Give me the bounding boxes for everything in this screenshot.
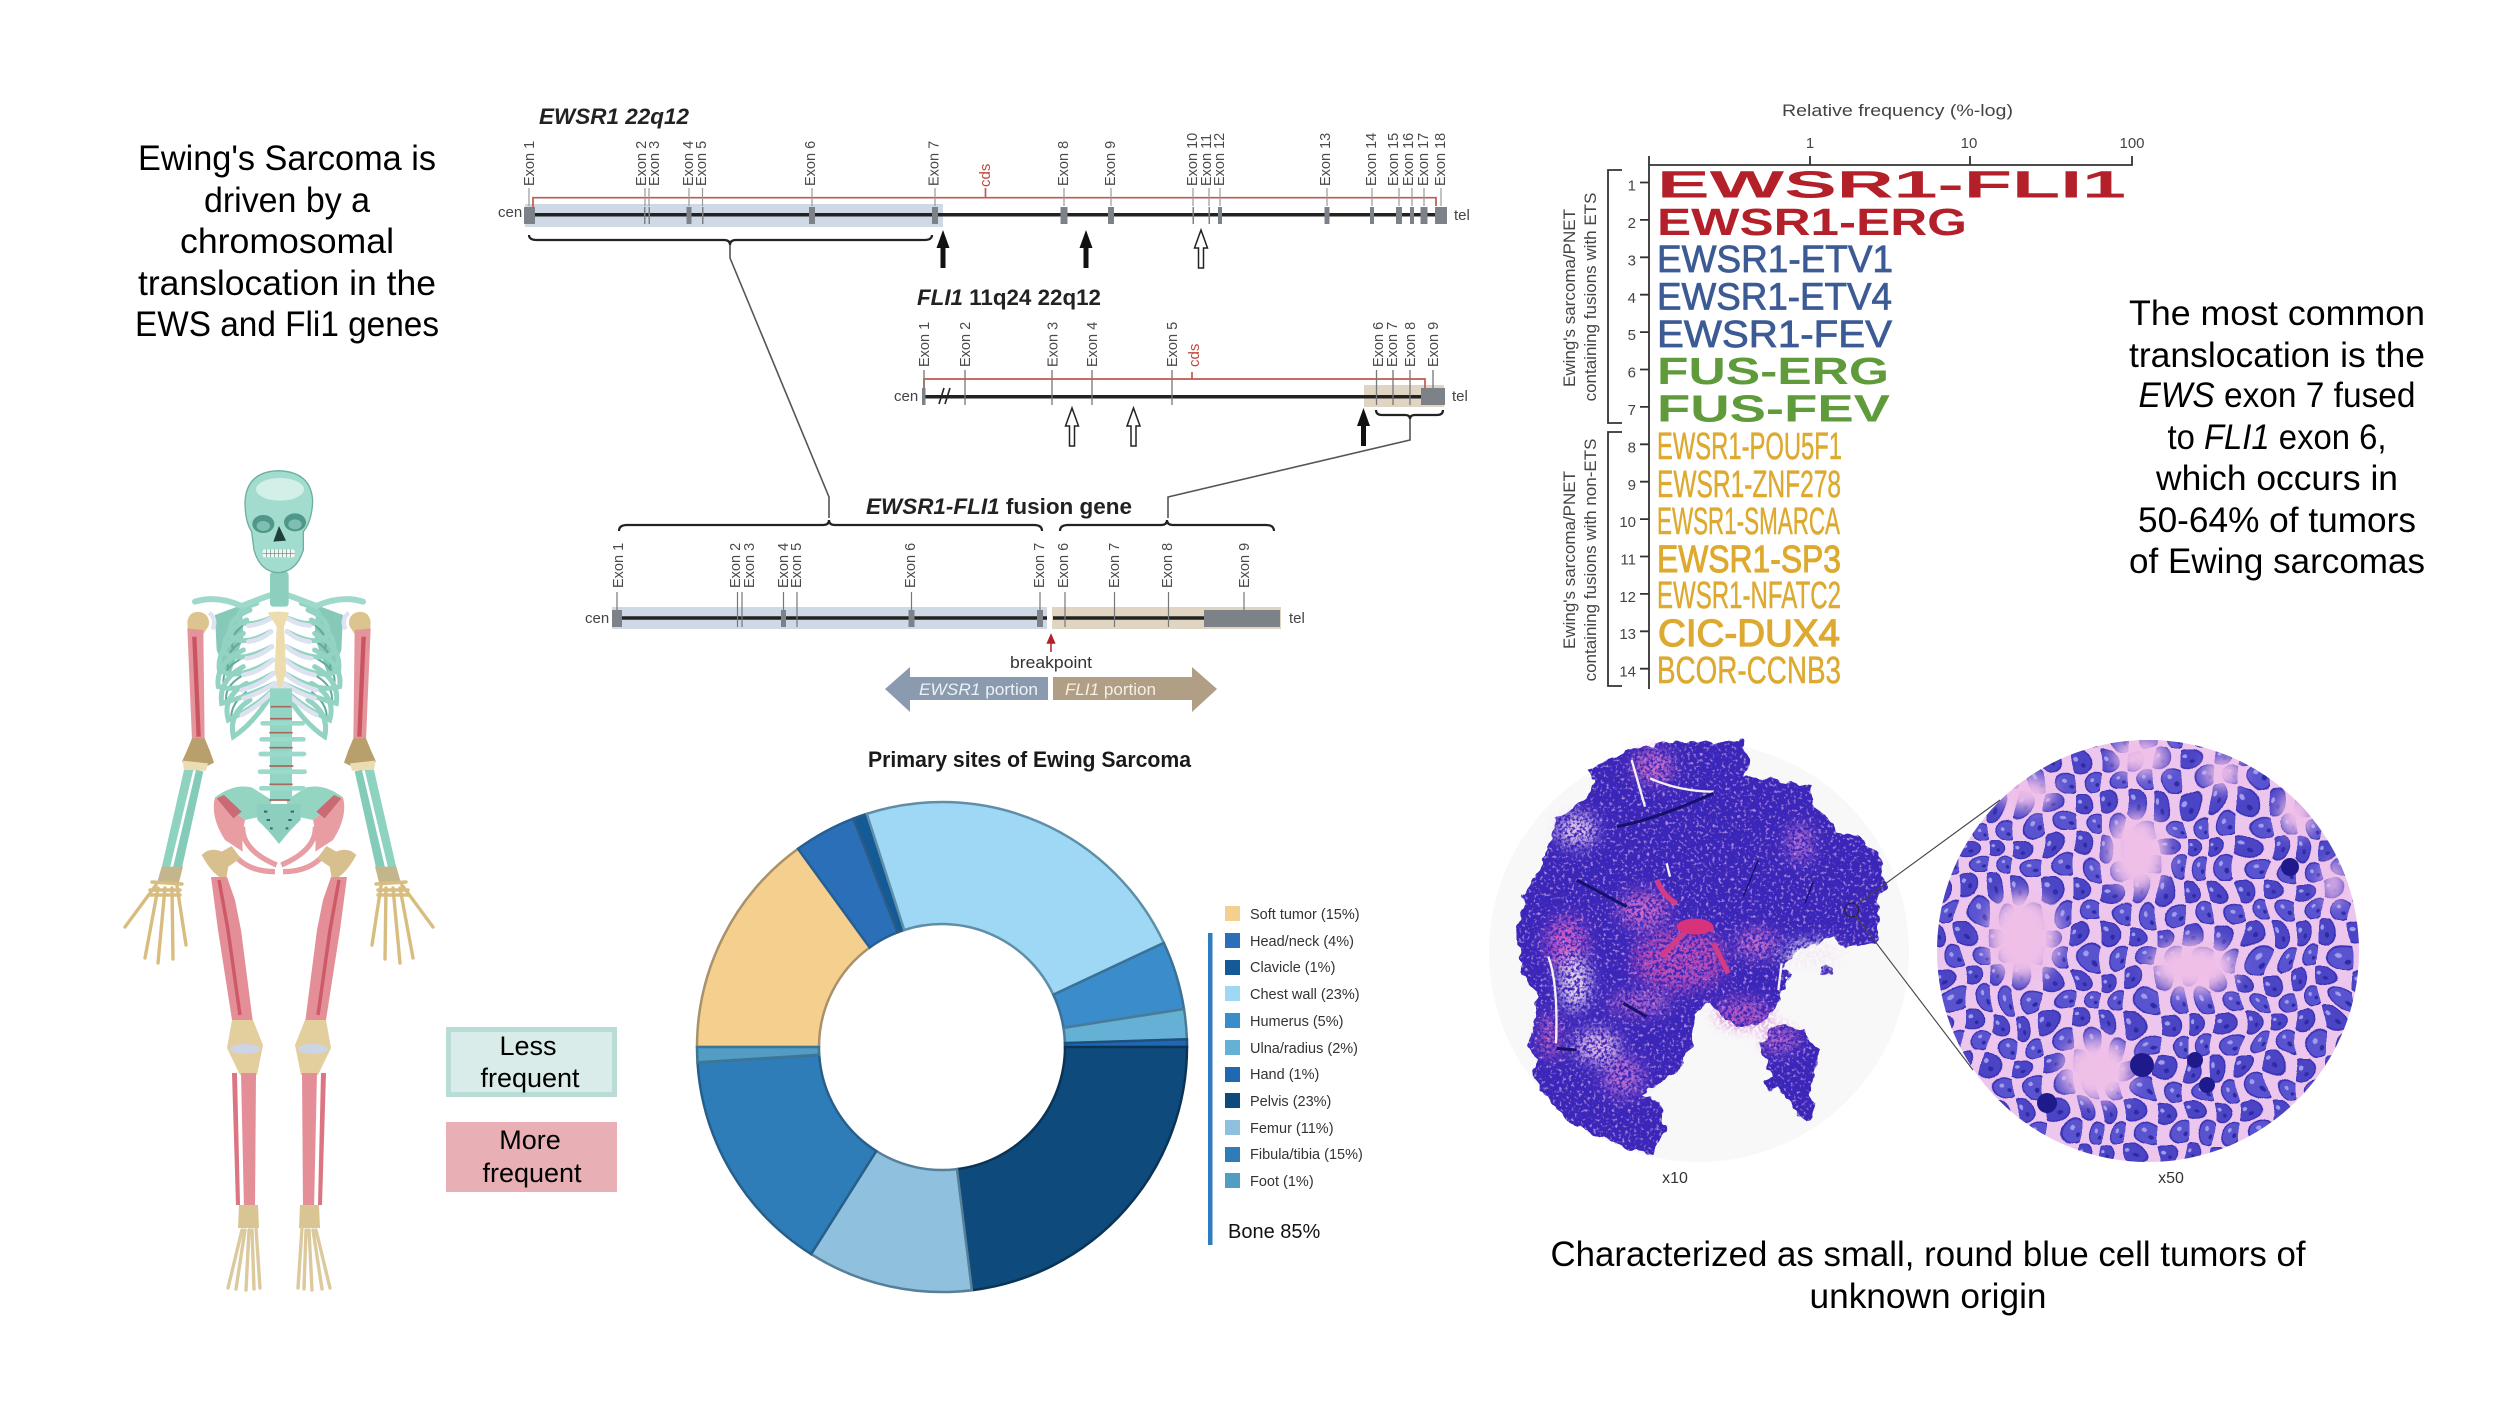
text block: histology caption: unknown origin [1810,1277,2046,1316]
rotated label line: fusions with non-ETS: containing fusions with non-ETS [1581,439,1600,681]
text block: most common translocation: The most common [2129,294,2425,333]
heading: chromosomal translocation text [135,139,439,344]
exon labels: Exon 8 [1056,141,1072,186]
fusion names: FUS-FEV [1657,388,1891,430]
legend: more frequent [446,1122,617,1192]
arrow: EWSR1 portion: EWSR1 portion [919,680,1038,699]
coding sequence bracket [533,188,1436,213]
panel: primary sites donut chart [697,747,1363,1292]
tibia [241,1073,256,1210]
axis tick labels: 100 [2119,135,2145,152]
exon labels: Exon 15 [1386,133,1402,186]
field background [1489,742,1909,1162]
chart title: Primary sites of Ewing Sarcoma [868,747,1192,772]
costal cartilage [242,618,277,715]
gene backbone [622,616,1205,620]
skull [245,471,313,573]
chart legend: Humerus (5%) [1250,1014,1343,1030]
hollow breakpoint arrows [1066,408,1140,446]
fusion names: EWSR1-ZNF278 [1657,464,1841,506]
legend: less frequent: Less [499,1031,557,1061]
solid breakpoint arrows [936,230,1092,268]
chart legend: Chest wall (23%) [1250,987,1360,1003]
chart legend: Femur (11%) [1250,1121,1334,1137]
humerus shaft [187,628,205,740]
fusion names [1657,164,2126,692]
braces [619,520,1274,531]
scapula [215,605,243,680]
eye socket shading [257,521,270,531]
stroma patches [1987,739,2343,1102]
ulna [159,770,193,881]
knee [227,1020,263,1075]
caption: x50: x50 [2158,1170,2184,1187]
exon labels: Exon 18 [1433,133,1449,186]
dark cracks [1557,793,1713,1050]
foot [228,1228,260,1290]
chart legend: Hand (1%) [1250,1067,1319,1083]
fusion names: EWSR1-SP3 [1657,539,1841,581]
heading: chromosomal translocation text: driven by a [204,181,371,220]
EWSR1 region band [612,607,1047,629]
chart legend: Pelvis (23%) [1250,1094,1331,1110]
knee cartilage [230,1044,260,1054]
intervertebral discs [269,707,293,800]
gene backbone [528,213,1442,216]
skeleton left half [125,595,277,1290]
chart legend: Soft tumor (15%) [1250,907,1360,923]
fusion names: CIC-DUX4 [1658,613,1840,655]
exon labels: Exon 12 [1212,133,1228,186]
eosinophilic and pale stroma [1541,750,1859,1097]
text block: most common translocation: 50-64% of tumors [2138,501,2416,540]
row numbers: 4 [1628,290,1636,307]
title: FLI1 11q24 22q12: FLI1 11q24 22q12 [917,285,1101,310]
exon labels: Exon 6 [803,141,819,186]
heading: chromosomal translocation text: translocation in the [138,264,436,303]
text block: histology caption [1550,1235,2306,1316]
exon labels: Exon 2 [958,322,974,367]
arrow: EWSR1 portion [885,667,1048,712]
exon labels: Exon 3 [1046,322,1062,367]
hollow breakpoint arrow [1194,230,1208,268]
forehead highlight [256,478,304,501]
rotated label line: Ewing's sarcoma/PNET ETS: Ewing's sarcoma/PNET [1560,209,1579,387]
rotated label line: Ewing's sarcoma/PNET non-ETS: Ewing's sarcoma/PNET [1560,471,1579,649]
clavicle [195,595,270,606]
chromosome break [939,388,950,404]
arm and torso bones [157,595,277,884]
exon boxes [922,388,1445,405]
connector: FLI1 portion to fusion gene [1168,419,1410,518]
cen and tel labels: tel [1452,388,1468,405]
chart legend: Ulna/radius (2%) [1250,1041,1358,1057]
tumor cells [1937,740,2359,1162]
bone bracket bar [1208,933,1212,1245]
legend: less frequent [448,1030,614,1094]
fusion names: EWSR1-ETV1 [1657,239,1893,281]
eye sockets [252,515,274,533]
text block: most common translocation: translocation is the [2129,336,2425,375]
back ribs [223,625,247,725]
cen and tel labels: cen [498,204,522,221]
cen and tel labels: cen [585,610,609,627]
legend: less frequent: frequent [480,1063,580,1093]
panel: fusion frequency chart [1560,101,2145,692]
donut [697,802,1187,1292]
solid breakpoint arrow [1357,408,1370,446]
exon labels: Exon 6 [1056,543,1072,588]
exon labels: Exon 16 [1401,133,1417,186]
title: EWSR1 22q12: EWSR1 22q12 [539,104,690,129]
heading: chromosomal translocation text: EWS and Fli1 genes [135,305,439,344]
dark nuclei [2037,858,2299,1113]
panel: histology x50 [1937,740,2359,1162]
exon labels: Exon 13 [1318,133,1334,186]
legend: more frequent: frequent [482,1158,582,1188]
exon labels: Exon 6 [1371,322,1387,367]
exon labels: Exon 10 [1185,133,1201,186]
cen and tel labels: cen [894,388,918,405]
skeleton right half [281,595,433,1290]
panel: skeleton illustration [125,471,433,1290]
humerus distal [182,738,214,767]
sacral holes [264,812,294,828]
ilium lower [214,797,245,852]
fusion names: EWSR1-SMARCA [1657,501,1840,543]
zoom guide lines [1855,800,2000,1070]
mottled stroma [1541,750,1843,1097]
fusion names: BCOR-CCNB3 [1657,650,1841,692]
humerus stripe [194,637,199,737]
row numbers: 13 [1619,626,1636,643]
row numbers: 3 [1628,252,1636,270]
text block: histology caption: Characterized as small, round blue cell tumors of [1550,1235,2306,1274]
chart legend [1225,906,1363,1190]
panel: EWSR1-FLI1 fusion gene diagram [585,494,1305,712]
thin dark lines [1743,860,1813,903]
teeth [263,549,295,557]
exon labels: Exon 7 [1032,543,1048,588]
row numbers: 1 [1628,178,1636,194]
title: fusion gene: EWSR1-FLI1 fusion gene [866,494,1132,519]
lumbar spine [270,688,292,800]
exon labels: Exon 8 [1160,543,1176,588]
exon boxes [524,207,1447,224]
femur shaft [211,877,253,1023]
pink stroma [1930,730,2370,1170]
exon leader lines [617,592,1244,627]
row numbers: 8 [1628,440,1636,456]
hemorrhage [1677,919,1713,935]
radius [171,770,203,877]
highlighted region [1364,385,1444,407]
magnified area marker [1845,903,1859,917]
heading: chromosomal translocation text: chromosomal [180,222,394,261]
tooth gaps [263,549,295,557]
exon labels: Exon 7 [1107,543,1123,588]
ribs [218,603,277,737]
femur stripe [219,880,240,1015]
exon labels: Exon 8 [1403,322,1419,367]
row numbers: 11 [1620,552,1636,568]
panel: histology x10 [1489,742,1909,1162]
exon labels: Exon 9 [1237,543,1253,588]
exon labels: Exon 5 [694,141,710,186]
text block: most common translocation: which occurs in [2155,459,2398,498]
row numbers: 14 [1619,664,1636,680]
fusion names: EWSR1-POU5F1 [1657,426,1842,468]
axis tick labels: 1 [1806,135,1814,152]
legend: more frequent: More [499,1125,561,1155]
exon labels: Exon 4 [681,141,697,186]
exon labels: Exon 1 [522,141,538,186]
axis title: Relative frequency (%-log) [1782,101,2013,120]
nose [273,526,286,542]
exon labels: Exon 9 [1103,141,1119,186]
exon labels: Exon 11 [1199,134,1215,186]
elbow band [183,761,208,771]
brace [1376,410,1443,419]
row numbers: 2 [1628,215,1636,232]
coding sequence bracket [924,372,1425,389]
axes and ticks [1640,156,2132,689]
FLI1 region band [1052,607,1281,629]
pubic ring [233,827,277,872]
cds label: cds [977,164,994,187]
exon labels: Exon 4 [1085,322,1101,367]
exon labels: Exon 4 [776,543,792,588]
exon labels: Exon 1 [611,543,627,588]
vertebral processes [260,723,305,788]
sternum [268,612,289,687]
pelvis half [202,786,277,880]
row numbers: 9 [1628,477,1636,494]
highlighted region [525,204,943,227]
fusion names: EWSR1-NFATC2 [1657,575,1841,617]
row numbers: 7 [1628,402,1636,419]
row numbers: 10 [1619,514,1636,531]
tissue section [1517,742,1888,1155]
text block: most common translocation [2129,294,2425,581]
panel: EWSR1 gene diagram [498,104,1470,268]
exon labels [917,322,1442,367]
ilium upper [215,786,272,820]
exon labels: Exon 2 [634,141,650,186]
brace [529,235,932,245]
exon labels: Exon 7 [926,141,942,186]
bone label: Bone 85% [1228,1221,1321,1243]
row numbers: 5 [1628,327,1636,344]
exon labels [611,543,1253,588]
cds label: cds [1186,344,1203,367]
cen and tel labels: tel [1289,610,1305,627]
shoulder cartilage [209,613,214,629]
arrow: FLI1 portion [1053,667,1217,712]
fibula [232,1073,240,1205]
exon leader lines [529,188,1441,206]
exon labels: Exon 7 [1385,322,1401,367]
exon labels: Exon 5 [789,543,805,588]
text block: most common translocation: EWS exon 7 fused [2138,376,2416,415]
forearm distal [157,867,183,884]
heading: chromosomal translocation text: Ewing's Sarcoma is [138,139,436,178]
fusion names: EWSR1-FEV [1657,314,1893,356]
exon labels: Exon 3 [647,141,663,186]
arrow: FLI1 portion: FLI1 portion [1065,680,1156,699]
row numbers: 12 [1619,589,1636,606]
chart legend: Clavicle (1%) [1250,960,1335,976]
humerus head [187,612,209,634]
exon labels: Exon 5 [1165,322,1181,367]
exon leader lines [924,370,1433,405]
cranium [245,471,313,573]
exon labels: Exon 6 [903,543,919,588]
panel: FLI1 gene diagram [894,285,1468,446]
fusion names: FUS-ERG [1657,351,1889,393]
chart legend: Foot (1%) [1250,1174,1314,1190]
cen and tel labels: tel [1454,207,1470,224]
fusion names: EWSR1-ERG [1657,202,1967,244]
exon boxes [612,610,1280,627]
rotated label line: fusions with ETS: containing fusions with ETS [1581,193,1600,401]
connector: EWSR1 portion to fusion gene [730,245,829,518]
exon labels: Exon 2 [728,543,744,588]
axis tick labels: 10 [1961,135,1977,152]
gene backbone [922,395,1422,398]
exon labels: Exon 1 [917,322,933,367]
exon labels: Exon 14 [1364,133,1380,186]
group brackets [1608,170,1622,686]
fusion names: EWSR1-ETV4 [1657,276,1892,318]
caption: x10: x10 [1662,1170,1688,1187]
sacrum [257,804,301,844]
exon labels: Exon 9 [1426,322,1442,367]
red stroma [1657,880,1728,973]
fusion names: EWSR1-FLI1 [1657,164,2126,206]
text block: most common translocation: to FLI1 exon 6, [2168,418,2386,457]
breakpoint label: breakpoint [1010,653,1092,672]
text block: most common translocation: of Ewing sarcomas [2129,542,2425,581]
exon labels: Exon 17 [1416,133,1432,186]
exon labels [522,133,1449,186]
breakpoint arrow [1048,635,1054,652]
ankle [238,1205,259,1228]
chart legend: Fibula/tibia (15%) [1250,1147,1363,1163]
hand [125,882,186,963]
ilium dark [217,795,242,818]
cervical spine [270,572,289,607]
femur head [202,846,241,880]
exon labels: Exon 3 [742,543,758,588]
chart legend: Head/neck (4%) [1250,934,1354,950]
row numbers: 6 [1628,364,1636,382]
axial skeleton [245,471,313,844]
white cracks [1548,760,1782,1043]
